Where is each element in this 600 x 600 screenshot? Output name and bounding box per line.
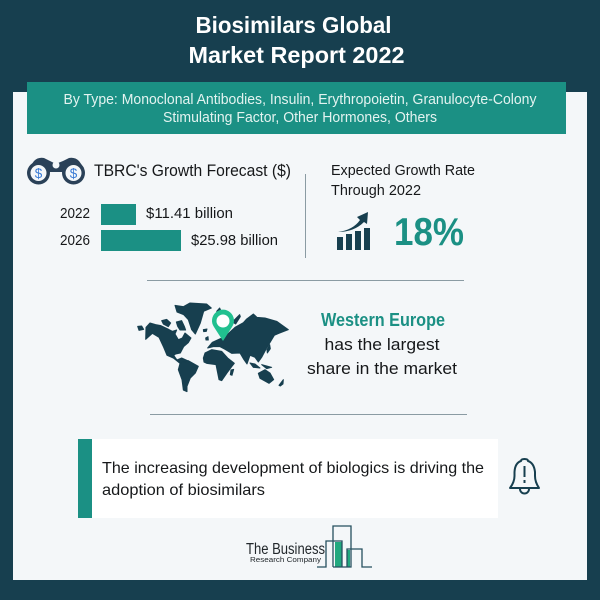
world map with pin [138,303,288,392]
icon: binoculars [27,158,85,184]
growth rate value: 18% [394,211,464,254]
bar row 2026: $25.98 billion [191,233,278,249]
driver callout: The increasing development of biologics is driving the [102,460,484,477]
bar row 2022 [60,204,233,225]
bar row 2026 [60,230,278,251]
logo: The Business Research Company: Research Company [250,557,322,564]
forecast heading: TBRC's Growth Forecast ($) [94,162,291,180]
title: Biosimilars Global [196,12,392,38]
growth rate label [331,162,475,199]
driver callout [78,439,498,518]
driver callout: adoption of biosimilars [102,482,265,499]
region callout: Western Europe [321,310,445,330]
segment banner [27,82,566,134]
bar row 2022: 2022 [60,206,90,222]
content panel [13,92,587,580]
growth rate label: Through 2022 [331,182,421,199]
icon: rising bars and arrow [337,212,370,250]
bar chart: forecast [60,204,278,251]
icon: alert bell [510,459,539,494]
icon: binoculars: $ [70,166,78,181]
title [188,12,404,68]
bar row 2022: $11.41 billion [146,206,233,222]
region callout: share in the market [307,359,457,378]
map: Africa, Eurasia and Australia [203,308,288,386]
region callout: has the largest [324,335,440,354]
title: Market Report 2022 [188,42,404,68]
logo: The Business Research Company: The Business [246,541,325,558]
growth rate label: Expected Growth Rate [331,162,475,179]
map: Americas and Greenland [138,303,211,392]
icon: location pin [212,310,234,341]
segment banner: Stimulating Factor, Other Hormones, Others [163,110,437,126]
segment banner: By Type: Monoclonal Antibodies, Insulin, Erythropoietin, Granulocyte-Colony [64,92,537,108]
region callout [307,310,457,378]
bar row 2026: 2026 [60,233,90,249]
icon: binoculars: $ [35,166,43,181]
logo: The Business Research Company [246,526,372,567]
